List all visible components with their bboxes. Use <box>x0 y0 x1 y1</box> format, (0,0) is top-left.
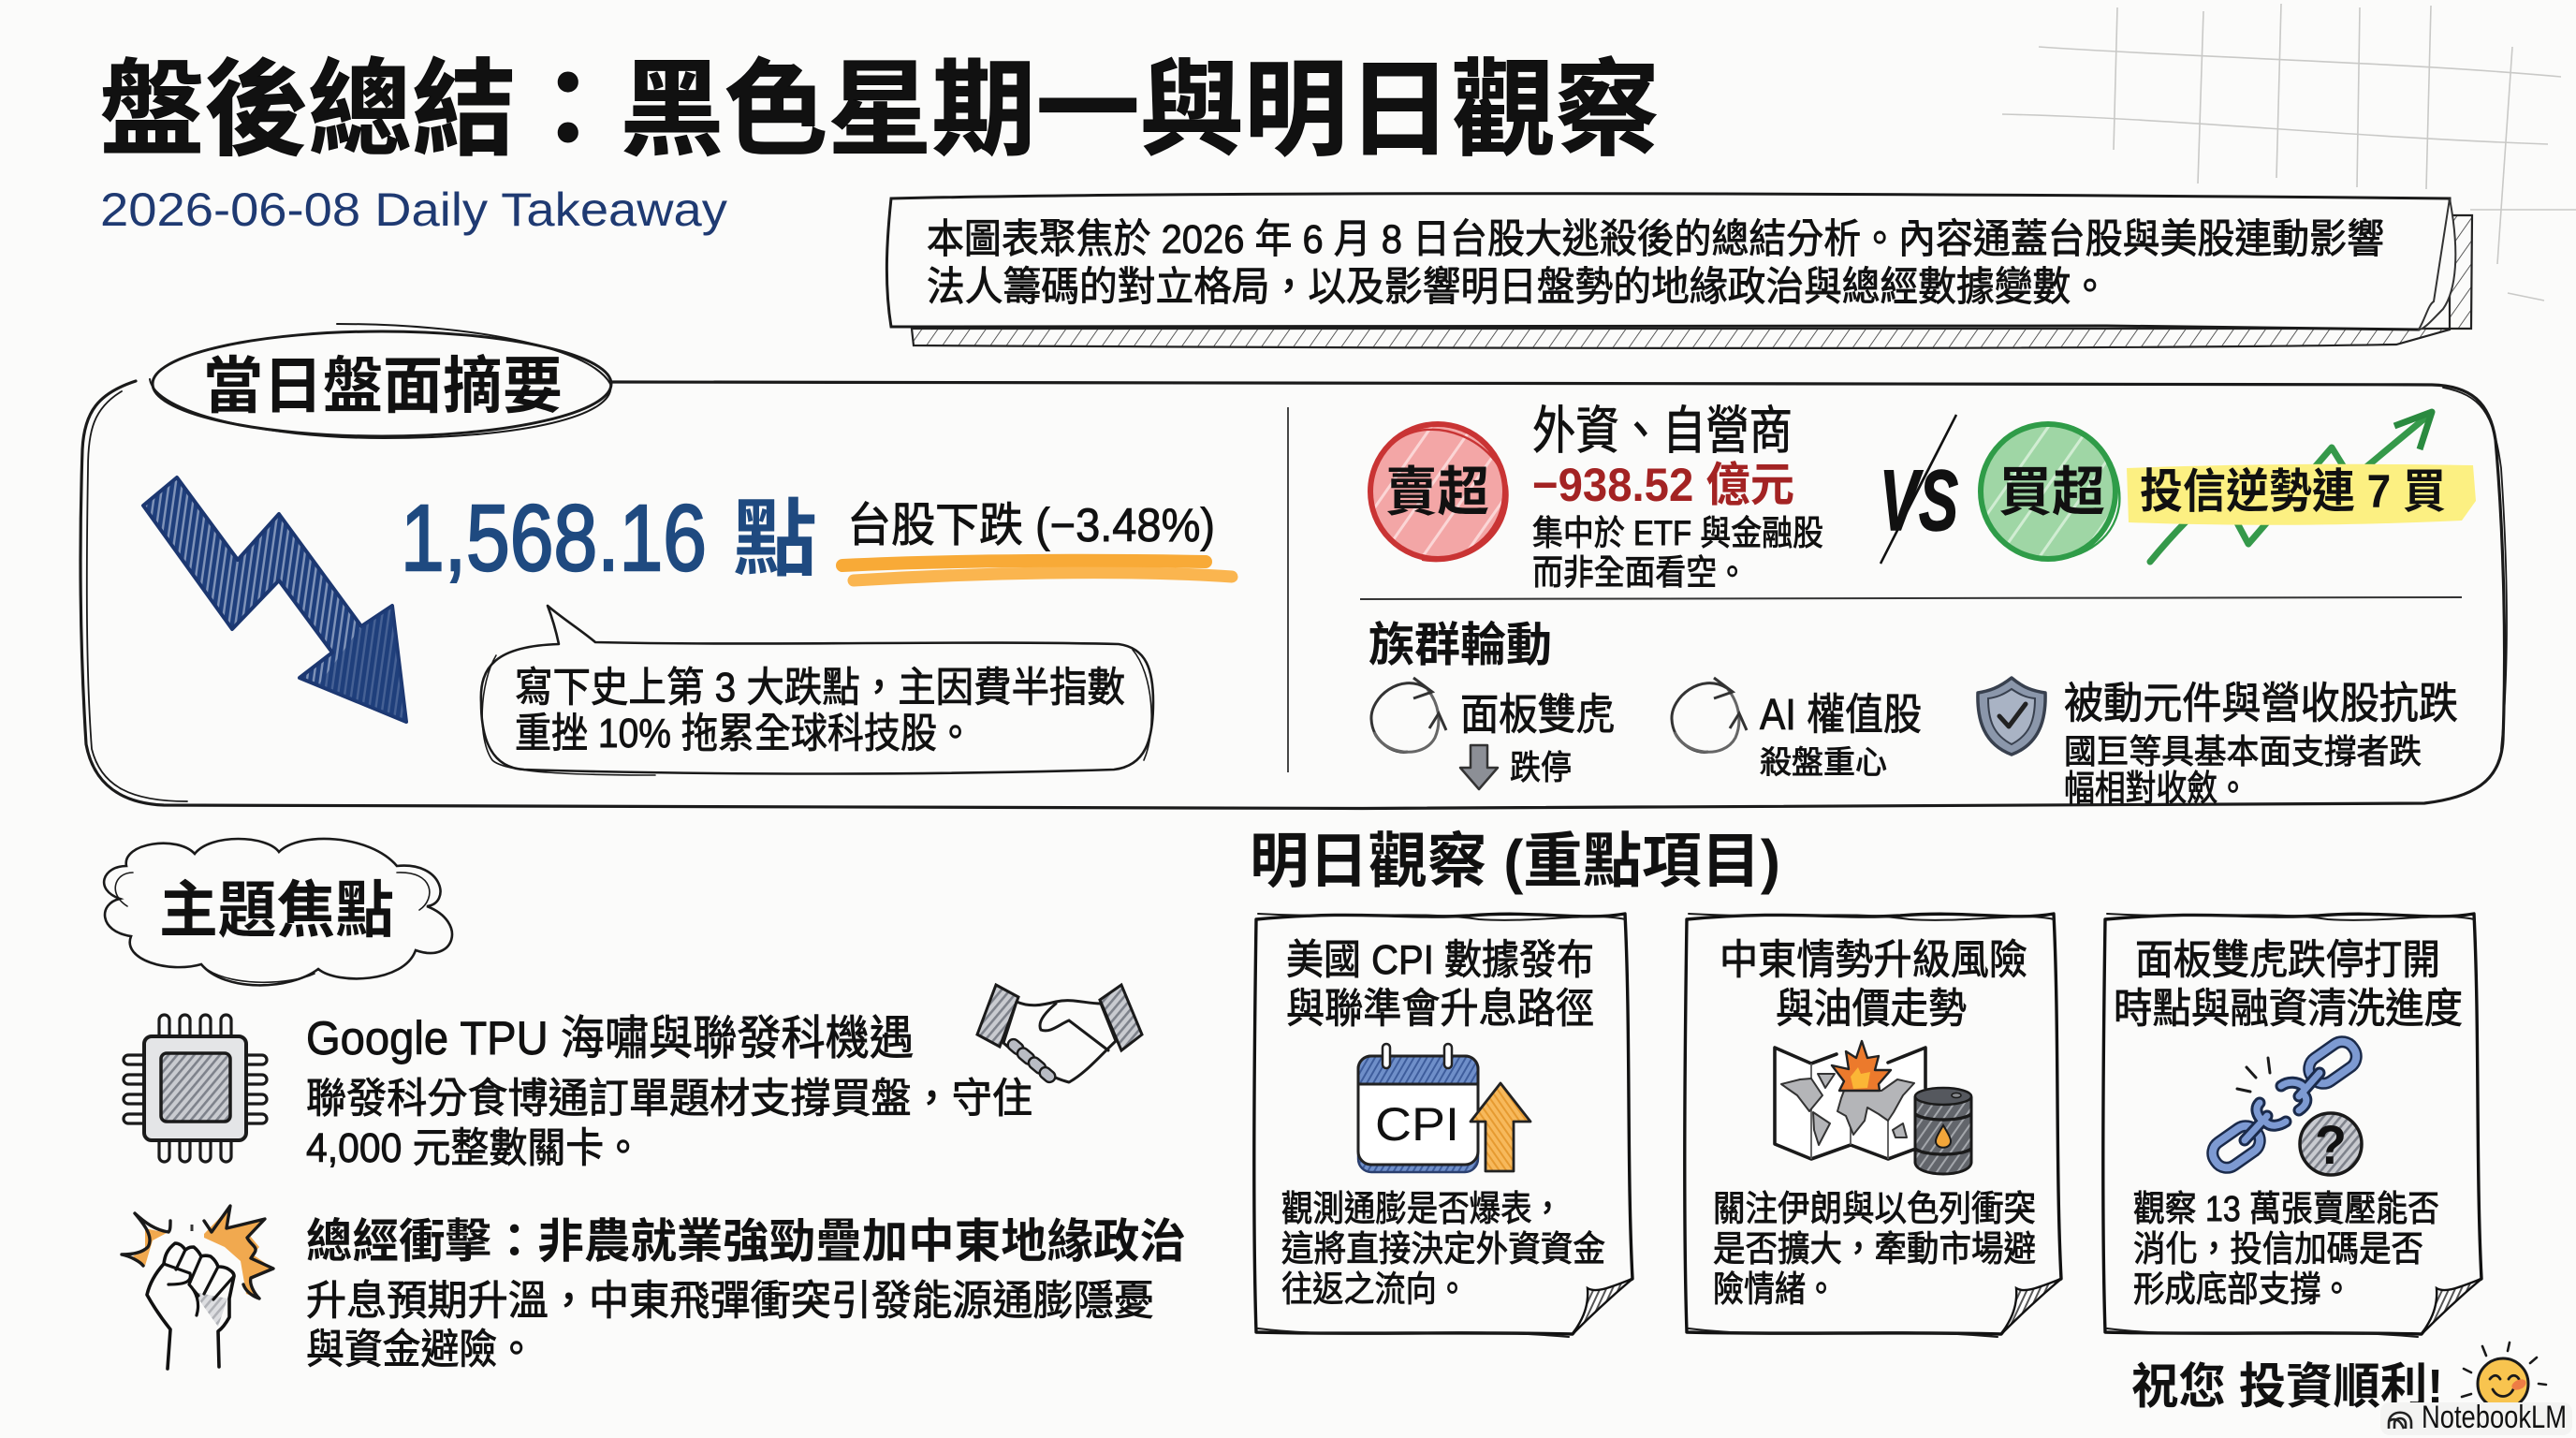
item: panel twin tigers <box>1371 678 1615 789</box>
badge: net sell <box>1370 424 1508 561</box>
text: Google TPU topic: 聯發科分食博通訂單題材支撐買盤，守住 <box>306 1076 1032 1122</box>
heading: sector rotation: 族群輪動 <box>1368 619 1552 671</box>
cloud heading: themes: 主題焦點 <box>159 875 394 945</box>
highlight: trust buying streak: 投信逆勢連 7 買 <box>2140 465 2446 518</box>
badge: net buy <box>1981 423 2119 560</box>
text: Google TPU topic <box>306 1012 1032 1171</box>
intro note: 法人籌碼的對立格局，以及影響明日盤勢的地緣政治與總經數據變數。 <box>927 265 2109 310</box>
icon: broken chain with question mark <box>2207 1036 2362 1176</box>
text: macro shock topic <box>306 1215 1186 1372</box>
item: AI heavyweights <box>1672 678 1922 781</box>
icon: smiling sun <box>2462 1343 2546 1409</box>
heading pill: daily summary: 當日盤面摘要 <box>203 351 563 420</box>
card: panel stocks: 觀察 13 萬張賣壓能否 <box>2133 1190 2439 1229</box>
card: panel stocks <box>2103 914 2481 1337</box>
big number: points drop: 點 <box>733 493 817 587</box>
item: AI heavyweights: 殺盤重心 <box>1760 745 1887 781</box>
icon: rising green arrow <box>2150 412 2432 562</box>
card: US CPI: 美國 CPI 數據發布 <box>1286 937 1594 983</box>
item: panel twin tigers: 跌停 <box>1510 748 1572 786</box>
text: foreign investors sell: 外資、自營商 <box>1532 402 1793 460</box>
text: passive components resist: 被動元件與營收股抗跌 <box>2064 679 2458 727</box>
icon: chip <box>124 1015 267 1162</box>
text: macro shock topic: 與資金避險。 <box>306 1327 535 1372</box>
heading pill: daily summary <box>150 324 611 438</box>
card: US CPI: 觀測通膨是否爆表， <box>1281 1190 1563 1229</box>
card: panel stocks: 消化，投信加碼是否 <box>2133 1230 2423 1269</box>
subtitle date: 2026-06-08 Daily Takeaway <box>100 183 727 236</box>
card: Middle East: 險情緒。 <box>1713 1270 1837 1310</box>
text: Google TPU topic: Google TPU 海嘯與聯發科機遇 <box>306 1012 914 1064</box>
text: passive components resist <box>2064 679 2458 809</box>
card: US CPI: 與聯準會升息路徑 <box>1286 986 1594 1032</box>
badge: net buy: 買超 <box>1998 462 2105 522</box>
text: foreign investors sell: 而非全面看空。 <box>1532 553 1748 592</box>
icon: handshake <box>977 985 1142 1084</box>
text: Google TPU topic: 4,000 元整數關卡。 <box>306 1125 642 1171</box>
panel: daily market summary <box>80 324 2507 809</box>
icon: broken chain with question mark: ? <box>2315 1115 2347 1176</box>
callout: record drop <box>481 606 1153 775</box>
text: macro shock topic: 升息預期升溫，中東飛彈衝突引發能源通膨隱憂 <box>306 1278 1154 1324</box>
card: Middle East: 是否擴大，牽動市場避 <box>1713 1230 2036 1269</box>
closing message: 祝您 投資順利! <box>2131 1360 2443 1415</box>
title: 盤後總結：黑色星期一與明日觀察 <box>100 51 1660 169</box>
label: index fall percent <box>842 499 1232 580</box>
card: Middle East: 與油價走勢 <box>1776 986 1967 1032</box>
item: panel twin tigers: 面板雙虎 <box>1460 690 1615 739</box>
icon: fist burst <box>122 1206 273 1369</box>
icon: CPI calendar: CPI <box>1375 1098 1459 1151</box>
card: US CPI: 這將直接決定外資資金 <box>1281 1230 1605 1269</box>
text: passive components resist: 幅相對收斂。 <box>2064 770 2248 809</box>
badge: net sell: 賣超 <box>1385 462 1489 522</box>
big number: points drop: 1,568.16 <box>401 486 707 591</box>
card: Middle East <box>1685 914 2061 1337</box>
text: passive components resist: 國巨等具基本面支撐者跌 <box>2064 732 2422 770</box>
card: panel stocks: 形成底部支撐。 <box>2133 1270 2352 1310</box>
card: Middle East: 關注伊朗與以色列衝突 <box>1713 1190 2036 1229</box>
icon: versus: VS <box>1880 453 1958 549</box>
callout: record drop: 重挫 10% 拖累全球科技股。 <box>515 711 973 756</box>
item: AI heavyweights: AI 權值股 <box>1760 690 1922 739</box>
label: index fall percent: 台股下跌 (−3.48%) <box>847 499 1215 551</box>
icon: falling zigzag arrow <box>143 477 406 722</box>
icon: versus <box>1880 415 1958 564</box>
card: US CPI: 往返之流向。 <box>1281 1270 1468 1310</box>
text: foreign investors sell: −938.52 億元 <box>1532 459 1794 511</box>
callout: record drop: 寫下史上第 3 大跌點，主因費半指數 <box>515 665 1125 711</box>
cloud heading: themes <box>104 839 452 985</box>
text: foreign investors sell: 集中於 ETF 與金融股 <box>1532 514 1823 552</box>
card: panel stocks: 時點與融資清洗進度 <box>2114 986 2463 1032</box>
icon: map with flame and oil barrel <box>1775 1041 1971 1174</box>
intro note: 本圖表聚焦於 2026 年 6 月 8 日台股大逃殺後的總結分析。內容通蓋台股與美股連動影響 <box>927 217 2384 262</box>
card: US CPI <box>1254 914 1632 1337</box>
card: Middle East: 中東情勢升級風險 <box>1720 937 2027 983</box>
icon: shield <box>1978 678 2045 755</box>
intro note <box>886 194 2472 348</box>
heading: tomorrow watch: 明日觀察 (重點項目) <box>1250 828 1780 895</box>
card: panel stocks: 面板雙虎跌停打開 <box>2135 937 2440 983</box>
text: foreign investors sell <box>1532 402 1823 592</box>
text: macro shock topic: 總經衝擊：非農就業強勁疊加中東地緣政治 <box>306 1215 1186 1268</box>
icon: CPI calendar <box>1358 1044 1530 1172</box>
